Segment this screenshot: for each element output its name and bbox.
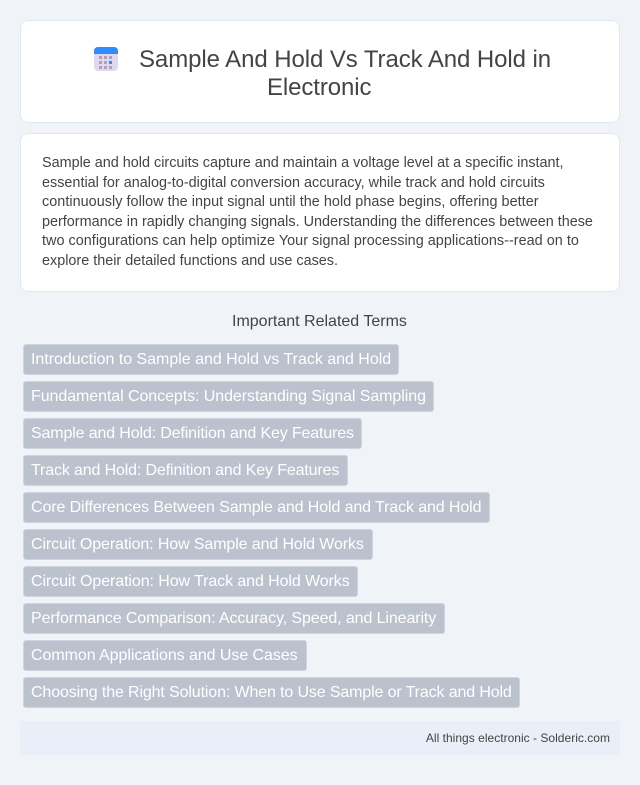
title	[139, 46, 551, 101]
term 8	[23, 603, 445, 634]
intro text panel	[20, 133, 620, 292]
intro paragraph: continuously follow the input signal until the hold phase begins, offering better	[42, 194, 539, 210]
term 6	[23, 529, 373, 560]
intro paragraph: performance in rapidly changing signals. Understanding the differences between these	[42, 214, 593, 230]
section heading: Important Related Terms	[232, 313, 407, 330]
term 9: Common Applications and Use Cases	[31, 647, 298, 664]
intro paragraph: Sample and hold circuits capture and maintain a voltage level at a specific instant,	[42, 155, 564, 171]
term 3	[23, 418, 362, 449]
term 4: Track and Hold: Definition and Key Features	[31, 462, 339, 479]
term 6: Circuit Operation: How Sample and Hold Works	[31, 536, 364, 553]
term 10: Choosing the Right Solution: When to Use Sample or Track and Hold	[31, 684, 512, 701]
term 2	[23, 381, 434, 412]
intro paragraph: two configurations can help optimize Your signal processing applications--read on to	[42, 233, 579, 249]
footer bar	[20, 721, 620, 755]
term 9	[23, 640, 307, 671]
term 7: Circuit Operation: How Track and Hold Works	[31, 573, 350, 590]
term 8: Performance Comparison: Accuracy, Speed, and Linearity	[31, 610, 436, 627]
intro paragraph: explore their detailed functions and use cases.	[42, 252, 338, 268]
term 4	[23, 455, 348, 486]
term 1	[23, 344, 399, 375]
term 5: Core Differences Between Sample and Hold and Track and Hold	[31, 499, 481, 516]
term 7	[23, 566, 358, 597]
title: Electronic	[267, 74, 371, 101]
header panel	[20, 20, 620, 123]
term 5	[23, 492, 490, 523]
term 1: Introduction to Sample and Hold vs Track and Hold	[31, 351, 391, 368]
term 10	[23, 677, 520, 708]
terms list	[23, 344, 520, 708]
intro paragraph	[42, 155, 593, 268]
icon: calendar	[94, 47, 118, 71]
intro paragraph: essential for analog-to-digital conversion accuracy, while track and hold circuits	[42, 174, 545, 190]
footer credit: All things electronic - Solderic.com	[426, 731, 610, 745]
term 3: Sample and Hold: Definition and Key Features	[31, 425, 354, 442]
term 2: Fundamental Concepts: Understanding Signal Sampling	[31, 388, 426, 405]
title: Sample And Hold Vs Track And Hold in	[139, 46, 551, 73]
